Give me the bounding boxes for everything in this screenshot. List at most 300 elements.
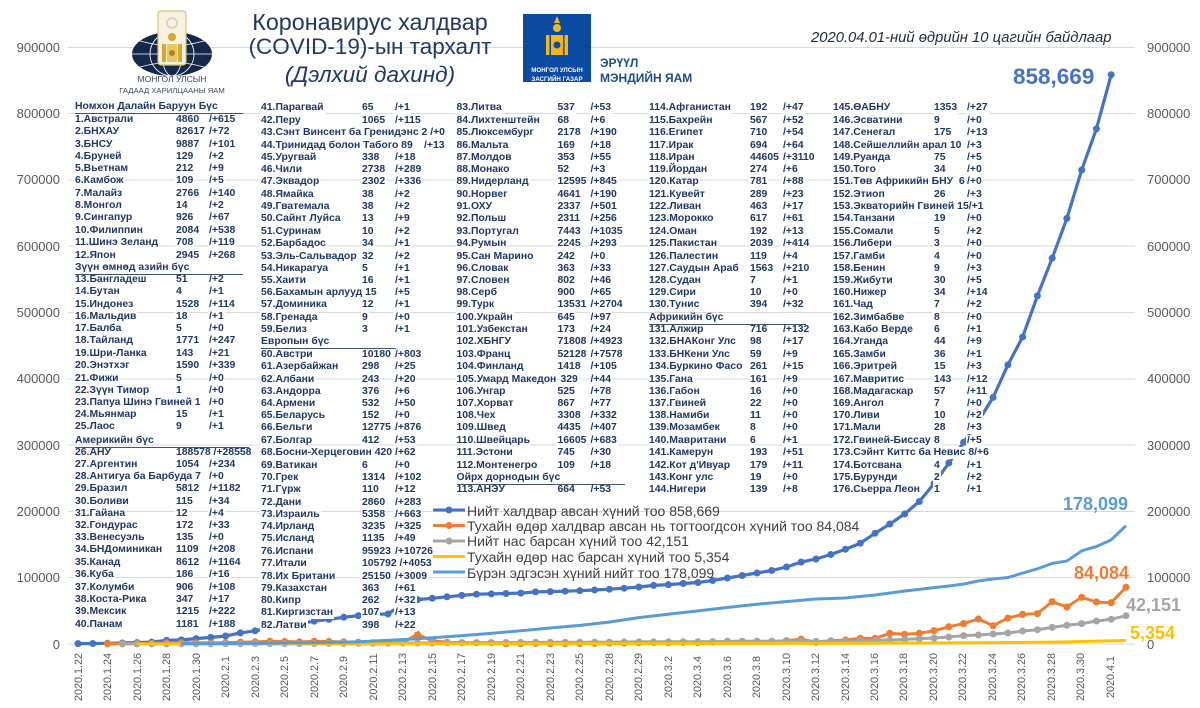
table column 1: Western Pacific, South-East Asia, Americas: 22.Зүүн Тимор	[75, 385, 149, 396]
table column 3: Europe, Middle East: 7443	[558, 226, 581, 237]
table column 2: Americas, Europe: 71.Гүрж	[261, 484, 301, 495]
table column 1: Western Pacific, South-East Asia, Americas: 8.Монгол	[75, 200, 122, 211]
table column 1: Western Pacific, South-East Asia, Americas: /+114	[209, 299, 235, 310]
table column 1: Western Pacific, South-East Asia, Americas: /+1	[209, 409, 224, 420]
table column 5: Africa: /+1	[967, 324, 982, 335]
table column 3: Europe, Middle East: 85.Люксембург	[456, 127, 534, 138]
table column 4: Middle East, Africa: 139.Мозамбек	[649, 422, 720, 433]
table column 5: Africa: /+5	[967, 435, 982, 446]
table column 1: Western Pacific, South-East Asia, Americas: 2084	[176, 225, 199, 236]
table column 4: Middle East, Africa: 130.Тунис	[649, 299, 699, 310]
table column 4: Middle East, Africa: 179	[750, 460, 767, 471]
table column 4: Middle East, Africa: 6	[750, 435, 756, 446]
table column 5: Africa: 172.Гвиней-Биссау	[833, 435, 931, 446]
table column 1: Western Pacific, South-East Asia, Americas: /+222	[209, 606, 235, 617]
table column 4: Middle East, Africa: /+17	[783, 201, 804, 212]
table column 3: Europe, Middle East: /+78	[590, 386, 611, 397]
table column 5: Africa: 5	[934, 226, 940, 237]
table column 2: Americas, Europe: /+13	[424, 140, 445, 151]
table column 2: Americas, Europe: 80.Кипр	[261, 595, 301, 606]
table column 3: Europe, Middle East: 89.Нидерланд	[456, 176, 529, 187]
table column 2: Americas, Europe: /+283	[395, 497, 421, 508]
table column 4: Middle East, Africa: 22	[750, 398, 762, 409]
table column 4: Middle East, Africa: 136.Габон	[649, 386, 700, 397]
table column 1: Western Pacific, South-East Asia, Americas: 51	[176, 274, 188, 285]
table column 1: Western Pacific, South-East Asia, Americas: 1054	[176, 459, 199, 470]
table column 5: Africa: 152.Этиоп	[833, 189, 885, 200]
logo: Ministry of Foreign Affairs: ГАДААД ХАРИЛЦААНЫ ЯАМ	[119, 86, 225, 94]
x axis date labels: 2020.2.7	[309, 656, 321, 698]
table column 1: Western Pacific, South-East Asia, Americas: 2945	[176, 250, 199, 261]
table column 1: Western Pacific, South-East Asia, Americas: /+4	[209, 508, 224, 519]
date note: 2020.04.01-ний өдрийн 10 цагийн байдлаар	[811, 30, 1111, 46]
table column 1: Western Pacific, South-East Asia, Americas: 1590	[176, 360, 199, 371]
x axis date labels: 2020.3.26	[1016, 653, 1028, 701]
right axis labels: 900000	[1147, 40, 1190, 55]
table column 3: Europe, Middle East: /+18	[590, 140, 611, 151]
table column 1: Western Pacific, South-East Asia, Americas: 24.Мьянмар	[75, 409, 137, 420]
table column 2: Americas, Europe: 45.Уругвай	[261, 152, 316, 163]
table column 3: Europe, Middle East: /+65	[590, 287, 611, 298]
table column 1: Western Pacific, South-East Asia, Americas: 23.Папуа Шинэ Гвиней 1	[75, 397, 201, 408]
table column 2: Americas, Europe: 12	[362, 299, 374, 310]
table column 1: Western Pacific, South-East Asia, Americas: 3.БНСУ	[75, 139, 112, 150]
table column 3: Europe, Middle East: 645	[558, 312, 575, 323]
x axis date labels: 2020.2.29	[633, 653, 645, 701]
right axis labels: 200000	[1147, 504, 1190, 519]
logo text: Ministry of Health: МЭНДИЙН ЯАМ	[600, 71, 692, 85]
table column 5: Africa: /+0	[967, 213, 982, 224]
table column 1: Western Pacific, South-East Asia, Americas: 1	[176, 385, 182, 396]
table column 1: Western Pacific, South-East Asia, Americas: 1771	[176, 335, 199, 346]
table column 2: Americas, Europe: 12775	[362, 422, 391, 433]
table column 1: Western Pacific, South-East Asia, Americas: /+234	[209, 459, 235, 470]
table column 2: Americas, Europe: /+289	[395, 164, 421, 175]
table column 5: Africa: 6	[934, 324, 940, 335]
x axis date labels: 2020.3.12	[810, 653, 822, 701]
table column 5: Africa: /+0	[967, 115, 982, 126]
table column 2: Americas, Europe: /+0	[395, 410, 410, 421]
x axis date labels: 2020.2.19	[486, 653, 498, 701]
table column 2: Americas, Europe: 69.Ватикан	[261, 460, 317, 471]
legend	[433, 502, 859, 581]
table column 5: Africa: 34	[934, 164, 946, 175]
table column 5: Africa: /+2	[967, 226, 982, 237]
table column 4: Middle East, Africa: 44605	[750, 152, 779, 163]
table column 3: Europe, Middle East: 101.Узбекстан	[456, 324, 528, 335]
table column 1: Western Pacific, South-East Asia, Americas: /+615	[209, 114, 235, 125]
table column 1: Western Pacific, South-East Asia, Americas: 35.Канад	[75, 557, 120, 568]
x axis date labels: 2020.3.24	[987, 653, 999, 701]
table column 2: Americas, Europe: /+2	[395, 226, 410, 237]
table column 1: Western Pacific, South-East Asia, Americas: 18	[176, 311, 188, 322]
x axis date labels: 2020.3.8	[751, 656, 763, 698]
table column 3: Europe, Middle East: 102.ХБНГУ	[456, 336, 511, 347]
table column 1: Western Pacific, South-East Asia, Americas: 19.Шри-Ланка	[75, 348, 147, 359]
data label: recovered: 178,099	[1063, 494, 1128, 514]
table column 5: Africa: 168.Мадагаскар	[833, 386, 913, 397]
table column 5: Africa: /+3	[967, 263, 982, 274]
table column 2: Americas, Europe: 25150	[362, 571, 391, 582]
table column 2: Americas, Europe: /+663	[395, 509, 421, 520]
table column 1: Western Pacific, South-East Asia, Americas: 7.Малайз	[75, 188, 122, 199]
heading: Americas region: Америкийн бүс	[75, 435, 154, 446]
table column 1: Western Pacific, South-East Asia, Americas: 129	[176, 151, 193, 162]
table column 2: Americas, Europe: 110	[362, 484, 379, 495]
table column 1: Western Pacific, South-East Asia, Americas: 906	[176, 582, 193, 593]
table column 5: Africa: 157.Гамби	[833, 251, 885, 262]
x axis date labels: 2020.3.6	[722, 656, 734, 698]
table column 2: Americas, Europe: 63.Андорра	[261, 386, 321, 397]
table column 1: Western Pacific, South-East Asia, Americas: 1.Австрали	[75, 114, 133, 125]
table column 1: Western Pacific, South-East Asia, Americas: /+16	[209, 569, 230, 580]
heading: South-East Asia region	[75, 262, 243, 275]
table column 3: Europe, Middle East: 105.Умард Македон	[456, 374, 556, 385]
title	[249, 9, 492, 87]
table column 1: Western Pacific, South-East Asia, Americas: 31.Гайана	[75, 508, 125, 519]
legend: Нийт нас барсан хүний тоо 42,151	[467, 533, 689, 549]
table column 4: Middle East, Africa: 123.Морокко	[649, 213, 714, 224]
table column 5: Africa: 154.Танзани	[833, 213, 895, 224]
table column 5: Africa: 15	[934, 361, 946, 372]
table column 1: Western Pacific, South-East Asia, Americas: 17.Балба	[75, 323, 121, 334]
table column 2: Americas, Europe: 76.Испани	[261, 546, 313, 557]
table column 4: Middle East, Africa: /+9	[783, 374, 798, 385]
table column 1: Western Pacific, South-East Asia, Americas: 12.Япон	[75, 250, 116, 261]
x axis date labels: 2020.4.1	[1105, 656, 1117, 698]
table column 5: Africa	[832, 102, 989, 495]
right axis labels: 0	[1147, 637, 1154, 652]
table column 1: Western Pacific, South-East Asia, Americas: 14	[176, 200, 188, 211]
table column 5: Africa: 7	[934, 398, 940, 409]
table column 1: Western Pacific, South-East Asia, Americas: /+1	[209, 311, 224, 322]
table column 5: Africa: 9	[934, 115, 940, 126]
table column 5: Africa: 150.Того	[833, 164, 876, 175]
table column 1: Western Pacific, South-East Asia, Americas: 18.Тайланд	[75, 335, 133, 346]
table column 1: Western Pacific, South-East Asia, Americas: 1215	[176, 606, 199, 617]
table column 4: Middle East, Africa: /+1	[783, 435, 798, 446]
table column 4: Middle East, Africa: 16	[750, 386, 762, 397]
series: daily new cases	[108, 587, 1126, 644]
table column 2: Americas, Europe: 2860	[362, 497, 385, 508]
table column 1: Western Pacific, South-East Asia, Americas: 12	[176, 508, 188, 519]
table column 3: Europe, Middle East: /+44	[590, 374, 611, 385]
table column 4: Middle East, Africa: 124.Оман	[649, 226, 697, 237]
table column 5: Africa: 164.Уганда	[833, 336, 888, 347]
table column 1: Western Pacific, South-East Asia, Americas: 4.Бруней	[75, 151, 122, 162]
table column 5: Africa: 156.Либери	[833, 238, 892, 249]
table column 4: Middle East, Africa: 119	[750, 251, 767, 262]
table column 4: Middle East, Africa: /+210	[783, 263, 809, 274]
table column 4: Middle East, Africa: 11	[750, 410, 761, 421]
table column 1: Western Pacific, South-East Asia, Americas: 16.Мальдив	[75, 311, 136, 322]
table column 5: Africa: 148.Сейшеллийн арал 10	[833, 140, 961, 151]
table column 1: Western Pacific, South-East Asia, Americas: /+208	[209, 544, 235, 555]
table column 1: Western Pacific, South-East Asia, Americas: 109	[176, 175, 193, 186]
table column 2: Americas, Europe: /+5	[395, 287, 410, 298]
table column 1: Western Pacific, South-East Asia, Americas	[74, 101, 252, 630]
table column 2: Americas, Europe: 57.Доминика	[261, 299, 327, 310]
table column 3: Europe, Middle East: 83.Литва	[456, 102, 502, 113]
heading: Africa region	[649, 312, 806, 325]
heading: Americas region	[75, 435, 249, 448]
table column 1: Western Pacific, South-East Asia, Americas: /+5	[209, 175, 224, 186]
table column 3: Europe, Middle East: 802	[558, 275, 575, 286]
x axis date labels: 2020.1.22	[73, 653, 85, 701]
table column 2: Americas, Europe: 5	[362, 263, 368, 274]
x axis date labels: 2020.1.28	[161, 653, 173, 701]
table column 4: Middle East, Africa: 122.Ливан	[649, 201, 701, 212]
table column 5: Africa: 176.Сьерра Леон	[833, 484, 920, 495]
table column 1: Western Pacific, South-East Asia, Americas: 82617	[176, 126, 205, 137]
table column 1: Western Pacific, South-East Asia, Americas: /+1182	[209, 483, 240, 494]
table column 3: Europe, Middle East: 3308	[558, 410, 581, 421]
table column 5: Africa: /+5	[967, 275, 982, 286]
table column 5: Africa: /+2	[967, 472, 982, 483]
x axis date labels: 2020.3.22	[957, 653, 969, 701]
table column 2: Americas, Europe: /+18	[395, 152, 416, 163]
table column 3: Europe, Middle East: 1418	[558, 361, 581, 372]
table column 2: Americas, Europe: 50.Сайнт Луйса	[261, 213, 341, 224]
table column 3: Europe, Middle East: /+1035	[590, 226, 623, 237]
table column 3: Europe, Middle East: 86.Мальта	[456, 140, 508, 151]
series: total confirmed cases	[78, 75, 1111, 644]
table column 1: Western Pacific, South-East Asia, Americas: 11.Шинэ Зеланд	[75, 237, 158, 248]
table column 3: Europe, Middle East: /+190	[590, 127, 617, 138]
table column 3: Europe, Middle East: 95.Сан Марино	[456, 251, 533, 262]
table column 2: Americas, Europe: 262	[362, 595, 379, 606]
table column 1: Western Pacific, South-East Asia, Americas: 926	[176, 212, 193, 223]
legend: Тухайн өдөр халдвар авсан нь тогтоогдсон хүний тоо 84,084	[467, 518, 859, 534]
table column 2: Americas, Europe: 38	[362, 201, 374, 212]
left axis labels: 0	[53, 637, 60, 652]
table column 3: Europe, Middle East: 87.Молдов	[456, 152, 512, 163]
table column 3: Europe, Middle East: /+501	[590, 201, 617, 212]
table column 1: Western Pacific, South-East Asia, Americas: 28.Антигуа ба Барбуда 7	[75, 471, 201, 482]
table column 3: Europe, Middle East: 664	[558, 484, 575, 495]
table column 2: Americas, Europe: 68.Босни-Херцеговин 420	[261, 447, 392, 458]
table column 2: Americas, Europe: 64.Армени	[261, 398, 315, 409]
table column 1: Western Pacific, South-East Asia, Americas: 10.Филиппин	[75, 225, 143, 236]
table column 2: Americas, Europe: /+3009	[395, 571, 427, 582]
table column 2: Americas, Europe: /+2	[395, 251, 410, 262]
table column 2: Americas, Europe: /+0	[395, 460, 410, 471]
table column 5: Africa: 4	[934, 460, 940, 471]
title: (Дэлхий дахинд)	[285, 62, 455, 87]
table column 5: Africa: 174.Ботсвана	[833, 460, 902, 471]
table column 2: Americas, Europe: /+2	[395, 201, 410, 212]
table column 2: Americas, Europe: /+336	[395, 176, 421, 187]
table column 3: Europe, Middle East: /+293	[590, 238, 617, 249]
table column 2: Americas, Europe: 79.Казахстан	[261, 583, 327, 594]
table column 4: Middle East, Africa: /+0	[783, 398, 798, 409]
left axis labels: 800000	[17, 106, 60, 121]
x axis date labels: 2020.3.28	[1046, 653, 1058, 701]
table column 2: Americas, Europe: 338	[362, 152, 379, 163]
table column 1: Western Pacific, South-East Asia, Americas: /+538	[209, 225, 235, 236]
table column 1: Western Pacific, South-East Asia, Americas: 5	[176, 373, 182, 384]
table column 4: Middle East, Africa: 161	[750, 374, 767, 385]
table column 1: Western Pacific, South-East Asia, Americas: /+72	[209, 126, 230, 137]
table column 5: Africa: 163.Кабо Верде	[833, 324, 913, 335]
table column 2: Americas, Europe: /+115	[395, 115, 421, 126]
table column 2: Americas, Europe: /+1	[395, 324, 410, 335]
table column 3: Europe, Middle East: 90.Норвег	[456, 189, 508, 200]
table column 2: Americas, Europe: /+53	[395, 435, 416, 446]
table column 2: Americas, Europe: 5358	[362, 509, 385, 520]
table column 4: Middle East, Africa: /+132	[783, 324, 809, 335]
table column 5: Africa: 36	[934, 349, 946, 360]
x axis date labels: 2020.3.16	[869, 653, 881, 701]
table column 2: Americas, Europe: 77.Итали	[261, 558, 307, 569]
left axis labels: 500000	[17, 305, 60, 320]
right axis labels: 700000	[1147, 172, 1190, 187]
table column 4: Middle East, Africa: /+0	[783, 386, 798, 397]
table column 3: Europe, Middle East: 52128	[558, 349, 586, 360]
logo: Mongolian Government square: МОНГОЛ УЛСЫН	[531, 67, 583, 74]
table column 3: Europe, Middle East: /+683	[590, 435, 617, 446]
table column 4: Middle East, Africa: 117.Ирак	[649, 140, 693, 151]
table column 3: Europe, Middle East: 96.Словак	[456, 263, 508, 274]
table column 1: Western Pacific, South-East Asia, Americas: 13.Бангладеш	[75, 274, 146, 285]
table column 2: Americas, Europe: 41.Парагвай	[261, 102, 324, 113]
table column 1: Western Pacific, South-East Asia, Americas: 5	[176, 323, 182, 334]
table column 3: Europe, Middle East: 363	[558, 263, 575, 274]
x axis date labels: 2020.1.24	[102, 653, 114, 701]
table column 2: Americas, Europe: 9	[362, 312, 368, 323]
table column 1: Western Pacific, South-East Asia, Americas: /+140	[209, 188, 235, 199]
table column 4: Middle East, Africa: 710	[750, 127, 767, 138]
x axis date labels: 2020.2.3	[250, 656, 262, 698]
table column 2: Americas, Europe: 95923	[362, 546, 391, 557]
table column 4: Middle East, Africa: /+64	[783, 140, 804, 151]
table column 4: Middle East, Africa: /+6	[783, 164, 798, 175]
table column 5: Africa: 9	[934, 263, 940, 274]
left axis labels: 200000	[17, 504, 60, 519]
table column 5: Africa: 1	[934, 484, 940, 495]
table column 3: Europe, Middle East: /+3	[590, 164, 605, 175]
table column 4: Middle East, Africa: 59	[750, 349, 762, 360]
table column 5: Africa: 4	[934, 251, 940, 262]
table column 1: Western Pacific, South-East Asia, Americas: 143	[176, 348, 193, 359]
table column 2: Americas, Europe: 1314	[362, 472, 385, 483]
table column 2: Americas, Europe: 74.Ирланд	[261, 521, 314, 532]
table column 1: Western Pacific, South-East Asia, Americas: 6.Камбож	[75, 175, 123, 186]
table column 2: Americas, Europe: 32	[362, 251, 374, 262]
table column 4: Middle East, Africa: 118.Иран	[649, 152, 695, 163]
table column 5: Africa: 170.Ливи	[833, 410, 880, 421]
table column 1: Western Pacific, South-East Asia, Americas: /+17	[209, 594, 230, 605]
table column 5: Africa: 146.Эсватини	[833, 115, 903, 126]
table column 1: Western Pacific, South-East Asia, Americas: 36.Куба	[75, 569, 114, 580]
table column 1: Western Pacific, South-East Asia, Americas: 9.Сингапур	[75, 212, 132, 223]
series: total deaths	[122, 616, 1126, 644]
table column 2: Americas, Europe: 65	[362, 102, 374, 113]
table column 1: Western Pacific, South-East Asia, Americas: /+2	[209, 151, 224, 162]
table column 1: Western Pacific, South-East Asia, Americas: 38.Коста-Рика	[75, 594, 146, 605]
table column 3: Europe, Middle East: /+2704	[590, 299, 623, 310]
table column 5: Africa: /+12	[967, 374, 988, 385]
table column 5: Africa: 169.Ангол	[833, 398, 884, 409]
x axis date labels: 2020.2.13	[397, 653, 409, 701]
table column 4: Middle East, Africa: 192	[750, 102, 767, 113]
table column 5: Africa: 155.Сомали	[833, 226, 893, 237]
table column 4: Middle East, Africa: 119.Йордан	[649, 164, 707, 175]
table column 3: Europe, Middle East: 900	[558, 287, 575, 298]
x axis date labels: 2020.2.9	[338, 656, 350, 698]
table column 3: Europe, Middle East: /+33	[590, 263, 611, 274]
table column 4: Middle East, Africa: 140.Мавритани	[649, 435, 726, 446]
table column 1: Western Pacific, South-East Asia, Americas: 15.Индонез	[75, 299, 133, 310]
table column 4: Middle East, Africa: 128.Судан	[649, 275, 701, 286]
table column 3: Europe, Middle East: 84.Лихтенштейн	[456, 115, 540, 126]
table column 2: Americas, Europe: 243	[362, 374, 379, 385]
table column 5: Africa: /+2	[967, 410, 982, 421]
table column 2: Americas, Europe: 10	[362, 226, 374, 237]
table column 2: Americas, Europe: 78.Их Британи	[261, 571, 335, 582]
table column 2: Americas, Europe: 363	[362, 583, 379, 594]
table column 1: Western Pacific, South-East Asia, Americas: 32.Гондурас	[75, 520, 138, 531]
title: (COVID-19)-ын тархалт	[249, 34, 491, 59]
x axis date labels: 2020.2.21	[515, 653, 527, 701]
table column 4: Middle East, Africa: 617	[750, 213, 767, 224]
heading: Western Pacific region: Номхон Далайн Баруун Бүс	[75, 101, 218, 112]
table column 3: Europe, Middle East: 525	[558, 386, 575, 397]
table column 4: Middle East, Africa: 125.Пакистан	[649, 238, 717, 249]
table column 4: Middle East, Africa: /+17	[783, 336, 804, 347]
table column 1: Western Pacific, South-East Asia, Americas: 40.Панам	[75, 619, 122, 630]
table column 1: Western Pacific, South-East Asia, Americas: 186	[176, 569, 193, 580]
table column 4: Middle East, Africa: 131.Алжир	[649, 324, 703, 335]
x axis date labels: 2020.1.26	[132, 653, 144, 701]
x axis date labels: 2020.3.10	[781, 653, 793, 701]
table column 1: Western Pacific, South-East Asia, Americas: 39.Мексик	[75, 606, 126, 617]
table column 2: Americas, Europe: 65.Беларусь	[261, 410, 325, 421]
table column 3: Europe, Middle East: /+55	[590, 152, 611, 163]
table column 5: Africa: /+13	[967, 127, 988, 138]
table column 1: Western Pacific, South-East Asia, Americas: /+2	[209, 274, 224, 285]
table column 5: Africa: /+1	[967, 349, 982, 360]
table column 3: Europe, Middle East: 537	[558, 102, 575, 113]
table column 1: Western Pacific, South-East Asia, Americas: 14.Бутан	[75, 286, 120, 297]
table column 2: Americas, Europe: 72.Дани	[261, 497, 301, 508]
table column 3: Europe, Middle East: /+190	[590, 189, 617, 200]
table column 2: Americas, Europe: 2302	[362, 176, 385, 187]
table column 4: Middle East, Africa: /+414	[783, 238, 809, 249]
table column 3: Europe, Middle East: 2245	[558, 238, 581, 249]
table column 5: Africa: 167.Мавритис	[833, 374, 904, 385]
table column 5: Africa: 153.Экваторийн Гвиней 15/+1	[833, 201, 983, 212]
table column 2: Americas, Europe: 3235	[362, 521, 385, 532]
table column 3: Europe, Middle East	[456, 102, 625, 495]
table column 2: Americas, Europe: /+102	[395, 472, 421, 483]
right axis labels: 600000	[1147, 239, 1190, 254]
table column 1: Western Pacific, South-East Asia, Americas: /+188	[209, 619, 235, 630]
table column 2: Americas, Europe: /+2	[395, 189, 410, 200]
table column 4: Middle East, Africa: /+15	[783, 361, 804, 372]
table column 5: Africa: 175.Бурунди	[833, 472, 897, 483]
left axis labels: 400000	[17, 371, 60, 386]
table column 5: Africa: 2	[934, 472, 940, 483]
table column 2: Americas, Europe: 152	[362, 410, 379, 421]
table column 4: Middle East, Africa: 137.Гвиней	[649, 398, 706, 409]
table column 5: Africa: 161.Чад	[833, 299, 873, 310]
table column 5: Africa: 171.Мали	[833, 422, 881, 433]
series: total recovered	[181, 526, 1126, 644]
table column 4: Middle East, Africa: /+47	[783, 102, 804, 113]
table column 2: Americas, Europe: 107	[362, 607, 379, 618]
table column 3: Europe, Middle East: 92.Польш	[456, 213, 506, 224]
